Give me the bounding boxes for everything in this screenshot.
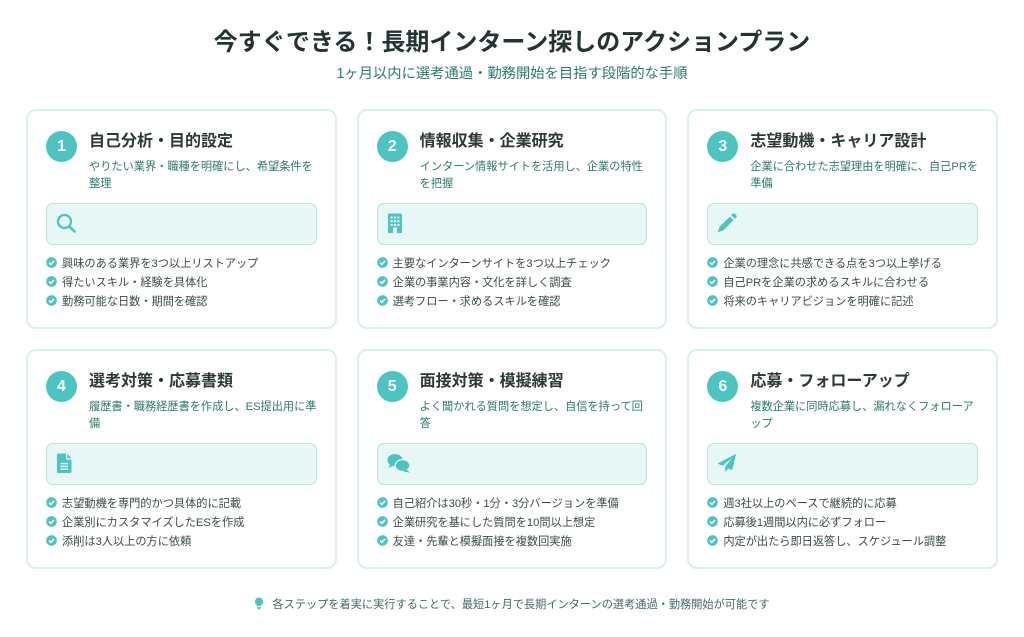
panel: step 1 [26,109,337,329]
step 3 checklist: 将来のキャリアビジョンを明確に記述 [723,296,914,308]
step number 5: 5 [388,378,397,395]
step number 2 [377,131,408,162]
step 5 description: 答 [420,418,431,430]
step 2 checklist: 企業の事業内容・文化を詳しく調査 [393,277,572,289]
step 4 description: 備 [89,418,100,430]
step 3 checklist: 企業の理念に共感できる点を3つ以上挙げる [723,258,942,270]
step 1 checklist: 勤務可能な日数・期間を確認 [62,296,207,308]
step 5 description: よく聞かれる質問を想定し、自信を持って回 [420,401,643,413]
step number 3 [707,131,738,162]
step 1 description: やりたい業界・職種を明確にし、希望条件を [89,161,313,173]
step number 1: 1 [57,138,66,155]
step number 1 [46,131,77,162]
step 4 icon box [46,443,317,485]
step 3 heading: 志望動機・キャリア設計 [750,133,926,150]
panel: step 2 [357,109,667,329]
step 2 checklist [377,257,611,308]
step 5 checklist [377,497,619,548]
subtitle: 1ヶ月以内に選考通過・勤務開始を目指す段階的な手順 [336,66,688,82]
step 4 heading: 選考対策・応募書類 [89,373,233,390]
step number 2: 2 [388,138,397,155]
step number 4: 4 [57,378,66,395]
step number 5 [377,371,408,402]
step 2 description: を把握 [420,178,453,190]
step 5 icon box [377,443,647,485]
step 6 description: ップ [750,418,773,430]
icon: pencil [718,213,737,232]
step 4 checklist: 企業別にカスタマイズしたESを作成 [62,517,244,529]
step 4 description [89,400,316,430]
step 1 checklist: 得たいスキル・経験を具体化 [62,277,207,289]
footer note: 各ステップを着実に実行することで、最短1ヶ月で長期インターンの選考通過・勤務開始が可能です [272,599,770,611]
step 5 checklist: 自己紹介は30秒・1分・3分バージョンを準備 [393,498,619,510]
step 3 checklist: 自己PRを企業の求めるスキルに合わせる [723,277,929,289]
step 1 description: 整理 [89,178,111,190]
step 1 icon box [46,203,317,245]
icon: magnifying glass [56,214,76,233]
step 4 checklist: 志望動機を専門的かつ具体的に記載 [62,498,241,510]
panel: step 4 [26,349,337,569]
step 5 checklist: 友達・先輩と模擬面接を複数回実施 [393,536,572,548]
icon: document [57,454,72,473]
step 1 description [89,160,313,190]
step 2 description [420,160,643,190]
step number 6 [707,371,738,402]
icon: building [388,214,402,233]
step 6 description: 複数企業に同時応募し、漏れなくフォローア [750,401,974,413]
title: 今すぐできる！長期インターン探しのアクションプラン [214,29,810,56]
step 3 description: 企業に合わせた志望理由を明確に、自己PRを [750,161,978,173]
icon: speech bubbles [387,454,410,473]
panel: step 3 [687,109,998,329]
step 3 description [750,160,978,190]
step 5 checklist: 企業研究を基にした質問を10問以上想定 [393,517,595,529]
step 2 description: インターン情報サイトを活用し、企業の特性 [420,161,643,173]
step 6 checklist: 応募後1週間以内に必ずフォロー [723,517,886,529]
panel: step 5 [357,349,667,569]
step 5 heading: 面接対策・模擬練習 [420,373,564,390]
step number 4 [46,371,77,402]
step number 6: 6 [718,378,727,395]
step 5 description [420,400,643,430]
step 2 checklist: 選考フロー・求めるスキルを確認 [393,296,560,308]
step 4 description: 履歴書・職務経歴書を作成し、ES提出用に準 [89,401,316,413]
step 3 checklist [707,257,942,308]
panel: step 6 [687,349,998,569]
step 6 description [750,400,974,430]
step 6 checklist [707,497,946,548]
step 6 checklist: 週3社以上のペースで継続的に応募 [723,498,897,510]
step 1 heading: 自己分析・目的設定 [89,133,233,150]
step 2 heading: 情報収集・企業研究 [420,133,564,150]
step 6 heading: 応募・フォローアップ [750,373,910,390]
step 4 checklist: 添削は3人以上の方に依頼 [62,536,191,548]
step 1 checklist [46,257,258,308]
step 3 description: 準備 [750,178,773,190]
step 3 icon box [707,203,978,245]
step 6 icon box [707,443,978,485]
icon: light bulb [254,598,264,610]
step 1 checklist: 興味のある業界を3つ以上リストアップ [62,258,258,270]
step 2 checklist: 主要なインターンサイトを3つ以上チェック [393,258,611,270]
step 4 checklist [46,497,244,548]
step 2 icon box [377,203,647,245]
icon: paper plane [718,454,736,472]
step 6 checklist: 内定が出たら即日返答し、スケジュール調整 [723,536,946,548]
step number 3: 3 [718,138,727,155]
